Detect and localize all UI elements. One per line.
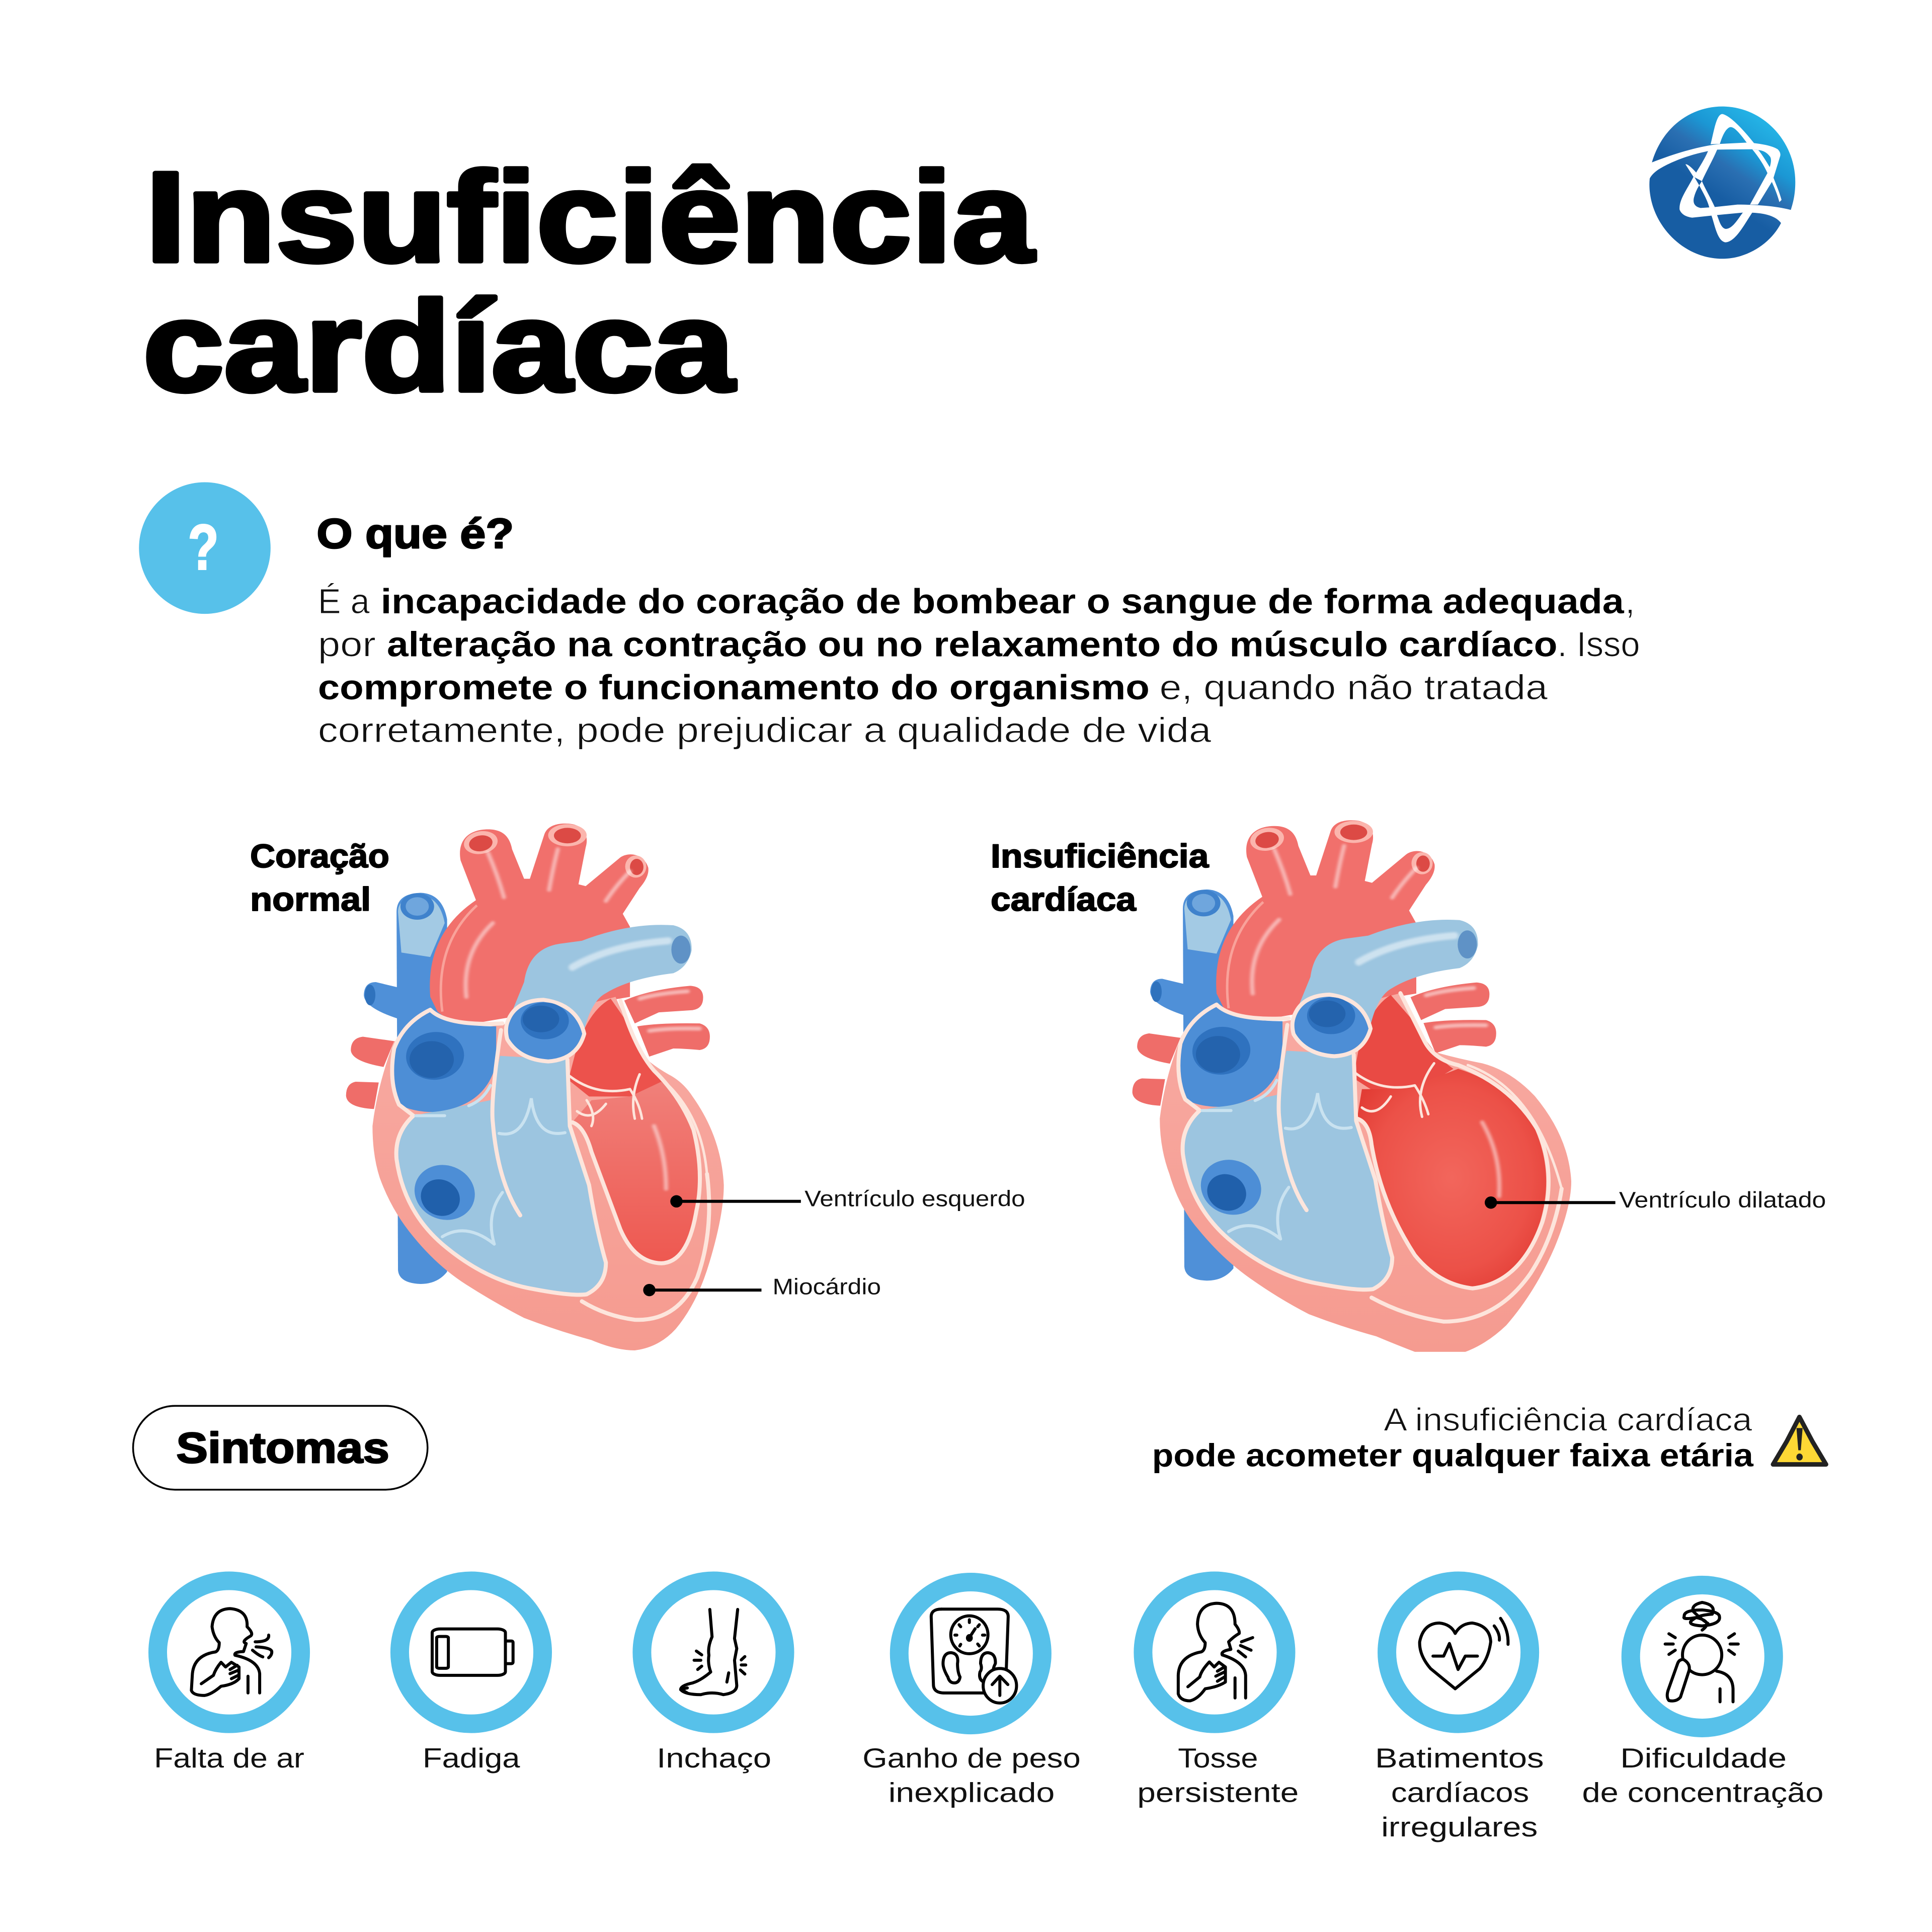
icon: swollen foot xyxy=(681,1609,746,1695)
icon: warning triangle xyxy=(1773,1417,1826,1465)
symptom: Tosse persistente xyxy=(1137,1581,1299,1808)
symptom: Dificuldade de concentração: de concentração xyxy=(1582,1777,1823,1808)
left atrium: dilated xyxy=(1353,995,1454,1093)
icon: logo xyxy=(1647,107,1796,259)
icon: heartbeat xyxy=(1420,1619,1508,1689)
callout: myocardium label: Miocárdio xyxy=(773,1275,881,1300)
callout: left ventricle label xyxy=(670,1187,1025,1212)
symptom: Batimentos cardíacos irregulares: cardíacos xyxy=(1391,1777,1529,1808)
left ventricle: normal xyxy=(572,1082,699,1263)
heading: Coração normal: Coração xyxy=(250,838,389,875)
text block: definition: compromete o funcionamento do organismo xyxy=(318,668,1150,707)
symptom: Ganho de peso inexplicado: Ganho de peso xyxy=(862,1742,1081,1774)
symptom: Tosse persistente: persistente xyxy=(1137,1777,1299,1808)
icon: question mark xyxy=(139,482,271,614)
callout: dilated ventricle label xyxy=(1485,1188,1826,1213)
symptom: Ganho de peso inexplicado: inexplicado xyxy=(889,1777,1055,1808)
heading: Insuficiência cardíaca: cardíaca xyxy=(991,881,1137,918)
text block: definition: por xyxy=(318,624,376,664)
title: Insuficiência xyxy=(145,145,1035,288)
symptom: Batimentos cardíacos irregulares xyxy=(1375,1581,1544,1842)
callout: age warning xyxy=(1152,1402,1826,1473)
callout: left ventricle label: Ventrículo esquerdo xyxy=(804,1187,1025,1212)
text block: definition: , xyxy=(1625,582,1635,621)
left ventricle: dilated xyxy=(1357,1069,1546,1286)
text block: definition: incapacidade do coração de bombear o sangue de forma adequada xyxy=(381,582,1625,621)
symptom: Dificuldade de concentração xyxy=(1582,1585,1823,1808)
heading: Sintomas: Sintomas xyxy=(176,1424,389,1472)
illustration: normal heart xyxy=(346,824,724,1350)
icon: shortness of breath xyxy=(191,1608,272,1696)
icon: question mark: ? xyxy=(188,511,219,583)
symptom: Batimentos cardíacos irregulares: irregulares xyxy=(1381,1811,1538,1842)
text block: definition: corretamente, pode prejudicar a qualidade de vida xyxy=(318,710,1212,750)
callout: age warning: A insuficiência cardíaca xyxy=(1384,1402,1752,1437)
heading: Coração normal xyxy=(250,838,389,918)
symptom: Inchaço xyxy=(642,1581,785,1774)
text block: definition: . Isso xyxy=(1558,624,1640,664)
heading: Insuficiência cardíaca xyxy=(991,838,1210,918)
symptom: Ganho de peso inexplicado xyxy=(862,1582,1081,1808)
symptom: Falta de ar: Falta de ar xyxy=(154,1742,304,1774)
heading: Insuficiência cardíaca: Insuficiência xyxy=(991,838,1210,875)
symptom: Falta de ar xyxy=(154,1581,304,1774)
symptom: Inchaço: Inchaço xyxy=(657,1742,771,1774)
heading: O que é?: O que é? xyxy=(316,510,514,557)
symptom: Fadiga: Fadiga xyxy=(423,1742,520,1774)
text block: definition: É a xyxy=(318,582,370,621)
heading: Sintomas xyxy=(133,1406,428,1490)
myocardium: dilated xyxy=(1160,993,1571,1352)
title: cardíaca xyxy=(143,274,736,418)
icon: low battery xyxy=(432,1629,513,1675)
text block: definition: e, quando não tratada xyxy=(1159,668,1548,707)
myocardium: normal xyxy=(372,997,724,1350)
heading: Coração normal: normal xyxy=(250,881,371,918)
illustration: failing heart xyxy=(1133,820,1571,1352)
icon: cough xyxy=(1178,1603,1253,1701)
symptom: Dificuldade de concentração: Dificuldade xyxy=(1620,1742,1787,1774)
icon: confused person xyxy=(1665,1602,1738,1702)
symptom: Fadiga xyxy=(399,1581,543,1774)
callout: age warning: pode acometer qualquer faixa etária xyxy=(1152,1437,1754,1473)
left atrium: normal xyxy=(569,999,671,1096)
icon: scale xyxy=(931,1609,1016,1703)
text block: definition: alteração na contração ou no relaxamento do músculo cardíaco xyxy=(387,624,1558,664)
text block: definition xyxy=(318,582,1640,750)
symptom: Tosse persistente: Tosse xyxy=(1178,1742,1258,1774)
title xyxy=(143,145,1035,418)
callout: myocardium label xyxy=(643,1275,881,1300)
callout: dilated ventricle label: Ventrículo dilatado xyxy=(1619,1188,1826,1213)
symptom: Batimentos cardíacos irregulares: Batimentos xyxy=(1375,1742,1544,1774)
